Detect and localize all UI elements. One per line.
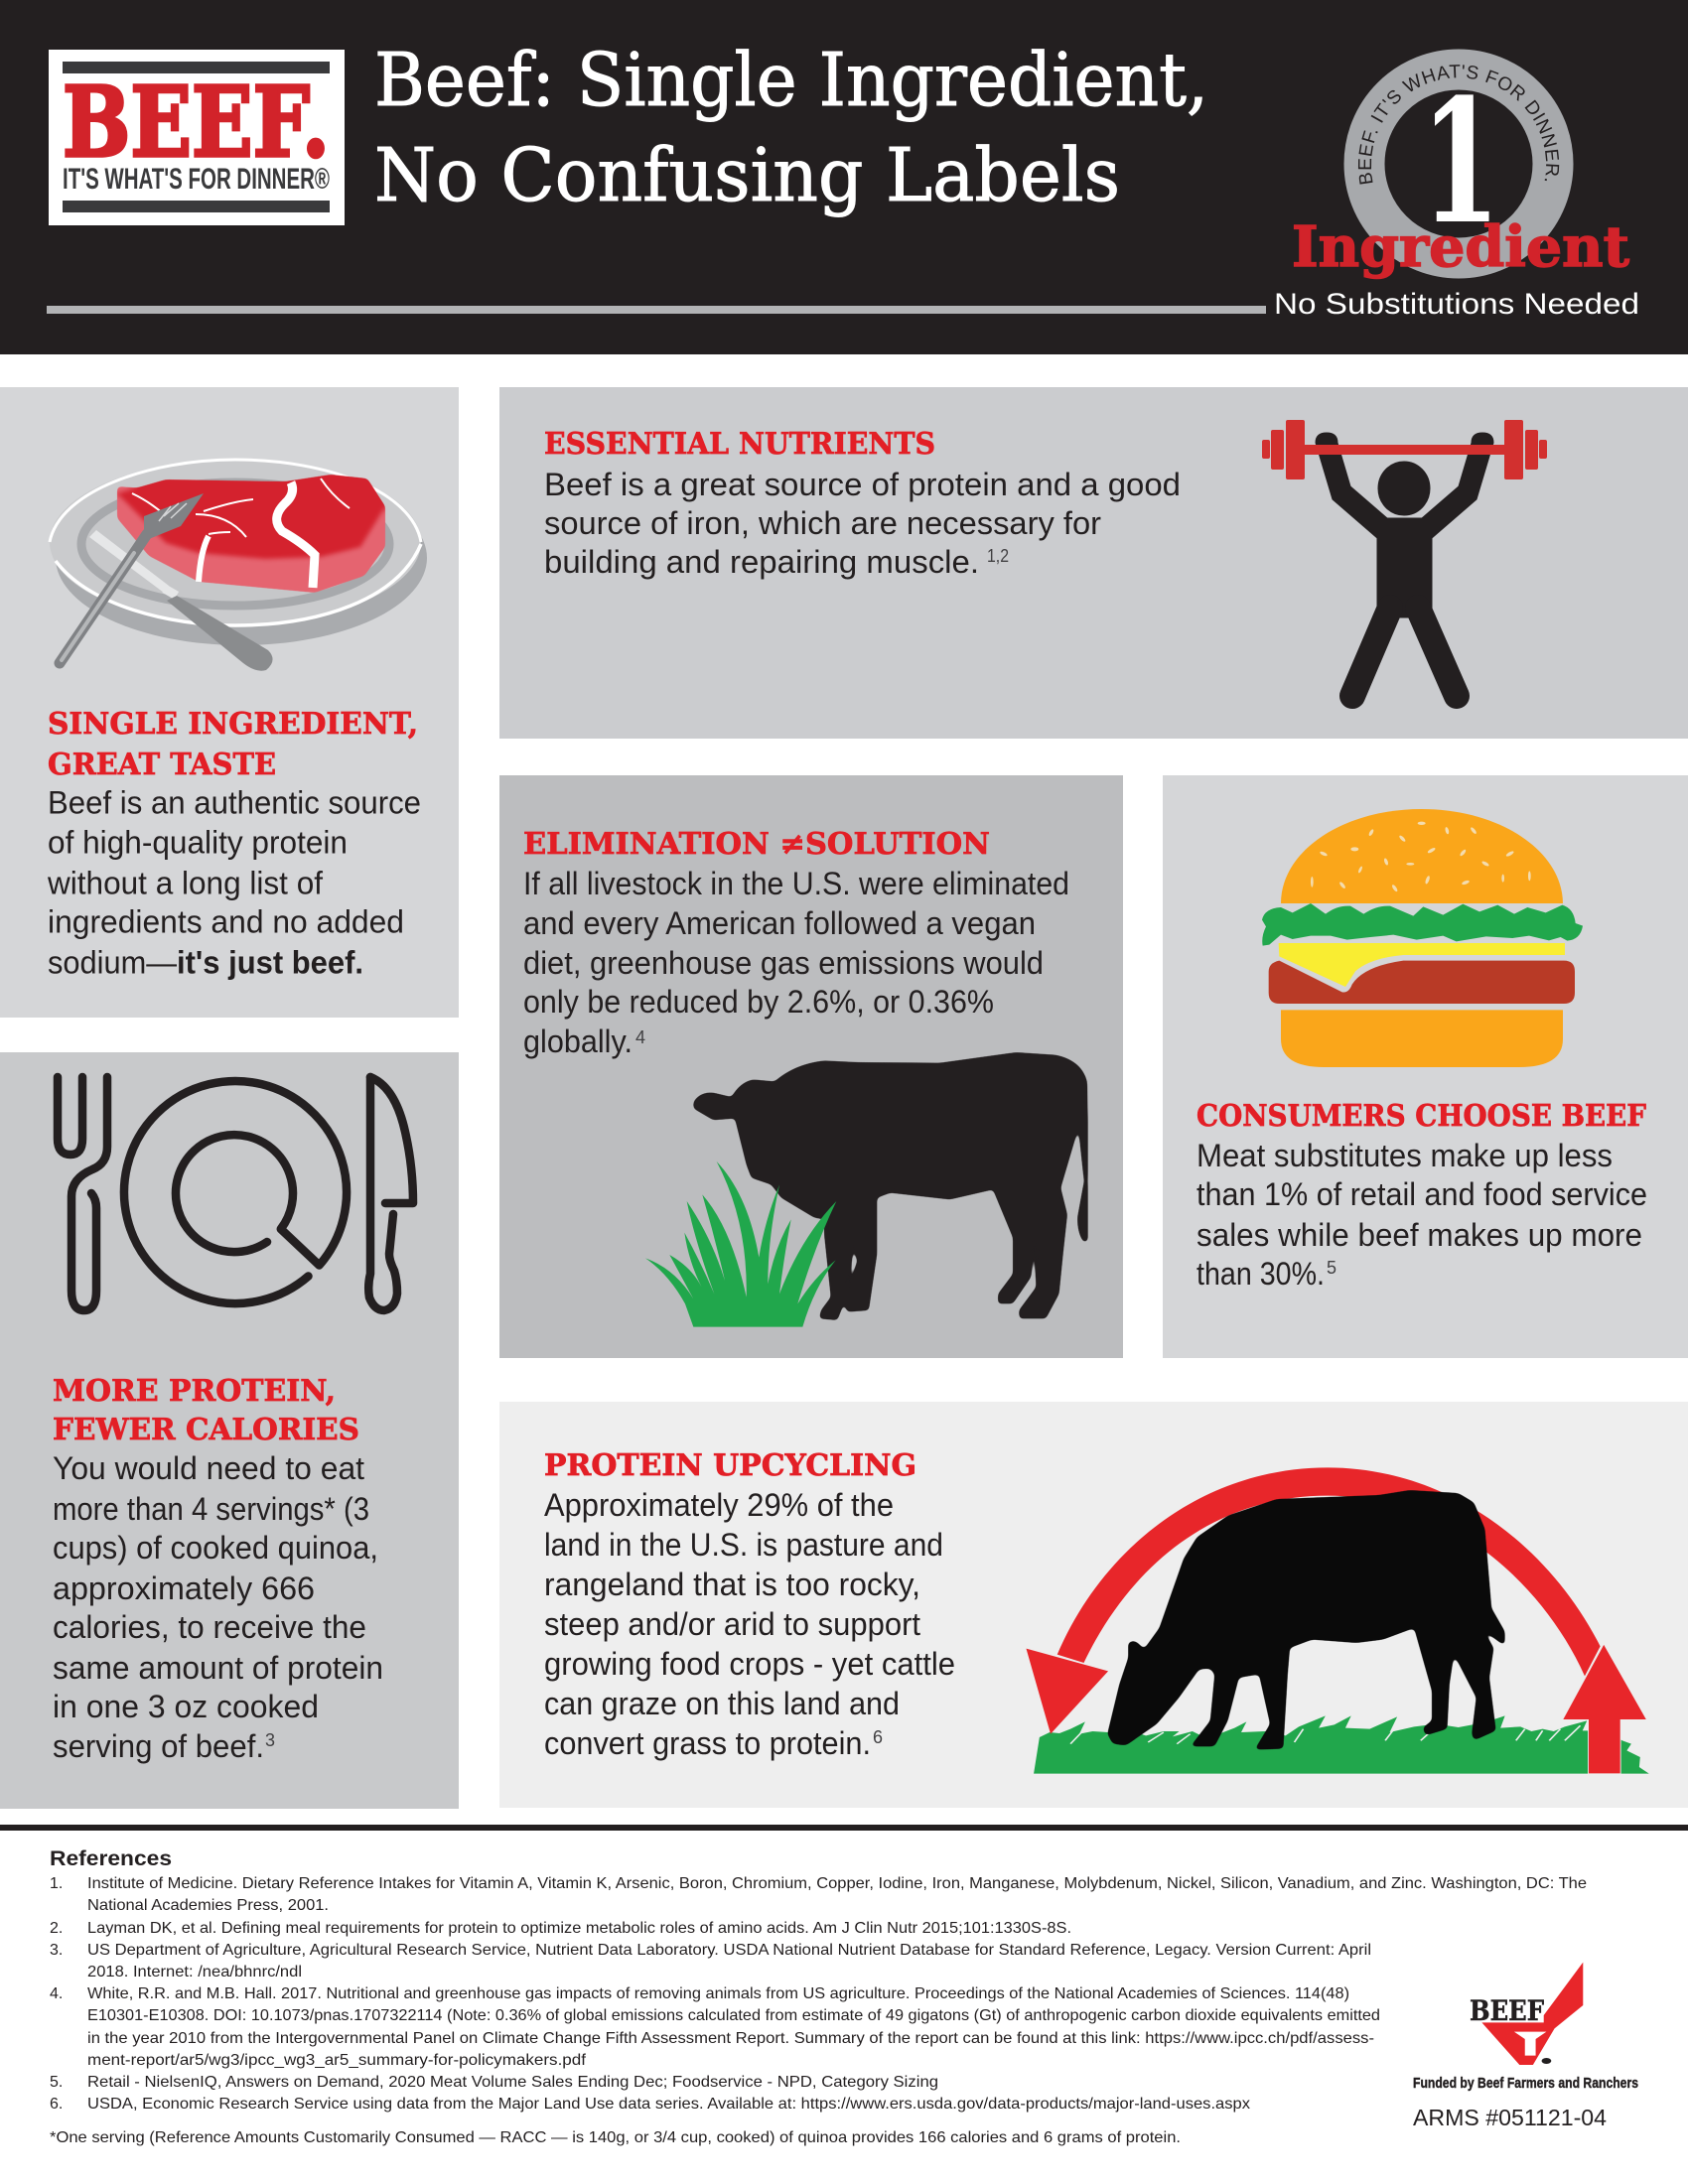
body text: land in the U.S. is pasture and bbox=[544, 1527, 943, 1563]
reference list: 5. bbox=[50, 2074, 63, 2091]
funding logo: ARMS #051121-04 bbox=[1413, 2105, 1607, 2130]
body text: 5 bbox=[1327, 1258, 1336, 1278]
body text: only be reduced by 2.6%, or 0.36% bbox=[523, 984, 994, 1020]
header banner bbox=[0, 0, 1688, 354]
body text: Meat substitutes make up less bbox=[1196, 1138, 1613, 1173]
body text bbox=[1196, 1138, 1647, 1292]
icon: grazing cow with cycle arrows bbox=[1026, 1467, 1649, 1774]
funding logo: BEEF bbox=[1470, 1994, 1544, 2027]
body text: Beef is an authentic source bbox=[48, 784, 421, 820]
funding logo bbox=[1413, 1963, 1638, 2130]
icon: cheeseburger bbox=[1262, 809, 1583, 1067]
reference list: Institute of Medicine. Dietary Reference Intakes for Vitamin A, Vitamin K, Arsenic, Boron, Chromium, Copper, Iodine, Iron, Manganese, Molybdenum, Nickel, Silicon, Vanadium, and Zinc. Washington, DC: The bbox=[87, 1875, 1587, 1892]
reference list: USDA, Economic Research Service using data from the Major Land Use data series. Available at: https://www.ers.usda.gov/data-products/major-land-uses.aspx bbox=[87, 2096, 1250, 2113]
panel: consumers choose beef bbox=[1163, 775, 1688, 1358]
body text: than 1% of retail and food service bbox=[1196, 1176, 1647, 1212]
title: No Confusing Labels bbox=[374, 133, 1120, 218]
reference list: 4. bbox=[50, 1985, 63, 2002]
icon: cow and grass bbox=[645, 1052, 1088, 1327]
body text: more than 4 servings* (3 bbox=[53, 1491, 369, 1527]
body text: in one 3 oz cooked bbox=[53, 1689, 319, 1724]
title: Beef: Single Ingredient, bbox=[374, 38, 1208, 123]
body text: 6 bbox=[873, 1727, 883, 1747]
reference list: White, R.R. and M.B. Hall. 2017. Nutritional and greenhouse gas impacts of removing animals from US agriculture. Proceedings of the National Academies of Sciences. 114(48) bbox=[87, 1985, 1349, 2002]
heading: PROTEIN UPCYCLING bbox=[544, 1448, 916, 1483]
body text bbox=[544, 1487, 955, 1761]
heading: GREAT TASTE bbox=[48, 748, 276, 782]
reference list: 1. bbox=[50, 1875, 63, 1892]
body text: of high-quality protein bbox=[48, 824, 348, 860]
body text: You would need to eat bbox=[53, 1450, 364, 1486]
reference list: 2. bbox=[50, 1920, 63, 1937]
heading: ELIMINATION ≠SOLUTION bbox=[523, 827, 990, 862]
body text: 1,2 bbox=[987, 546, 1009, 566]
body text: and every American followed a vegan bbox=[523, 905, 1036, 941]
badge: 1 ingredient: No Substitutions Needed bbox=[1274, 288, 1639, 321]
body text: ingredients and no added bbox=[48, 903, 404, 939]
body text: Approximately 29% of the bbox=[544, 1487, 894, 1523]
reference list: 6. bbox=[50, 2096, 63, 2113]
body text bbox=[544, 467, 1181, 580]
reference list: E10301-E10308. DOI: 10.1073/pnas.1707322114 (Note: 0.36% of global emissions calculated from estimate of 49 gigatons (Gt) of anthropogenic carbon dioxide equivalents emitted bbox=[87, 2007, 1380, 2024]
heading bbox=[48, 707, 418, 782]
reference list: 3. bbox=[50, 1942, 63, 1959]
body text: rangeland that is too rocky, bbox=[544, 1567, 920, 1602]
body text: source of iron, which are necessary for bbox=[544, 505, 1101, 541]
body text: without a long list of bbox=[47, 866, 323, 901]
body text: building and repairing muscle. bbox=[544, 544, 979, 580]
icon: weightlifter bbox=[1262, 420, 1547, 696]
panel: single ingredient, great taste bbox=[0, 387, 459, 1018]
body text: convert grass to protein. bbox=[544, 1725, 871, 1761]
reference list: Layman DK, et al. Defining meal requirements for protein to optimize metabolic roles of amino acids. Am J Clin Nutr 2015;101:1330S-8S. bbox=[87, 1920, 1071, 1937]
heading: SINGLE INGREDIENT, bbox=[48, 707, 418, 742]
panel: protein upcycling bbox=[499, 1402, 1688, 1808]
badge: 1 ingredient: Ingredient bbox=[1292, 214, 1629, 280]
panel: more protein, fewer calories bbox=[0, 1052, 459, 1809]
references heading: References bbox=[50, 1847, 172, 1870]
reference list: US Department of Agriculture, Agricultural Research Service, Nutrient Data Laboratory. USDA National Nutrient Database for Standard Reference, Legacy. Version Current: April bbox=[87, 1942, 1371, 1959]
logo: Beef It's What's For Dinner: IT'S WHAT'S FOR DINNER® bbox=[63, 163, 330, 196]
reference list bbox=[50, 1875, 1587, 2113]
reference list: ment-report/ar5/wg3/ipcc_wg3_ar5_summary-for-policymakers.pdf bbox=[87, 2052, 587, 2069]
heading bbox=[53, 1374, 359, 1447]
body text: sales while beef makes up more bbox=[1196, 1217, 1642, 1253]
badge: 1 ingredient bbox=[1274, 50, 1639, 321]
body text: globally. bbox=[523, 1024, 633, 1059]
body text: same amount of protein bbox=[53, 1650, 383, 1686]
body text bbox=[53, 1450, 383, 1764]
footnote: *One serving (Reference Amounts Customarily Consumed — RACC — is 140g, or 3/4 cup, cooked) of quinoa provides 166 calories and 6 grams of protein. bbox=[50, 2129, 1181, 2146]
body text: calories, to receive the bbox=[53, 1609, 366, 1645]
logo: Beef It's What's For Dinner bbox=[49, 50, 345, 225]
badge: 1 ingredient: BEEF. IT'S WHAT'S FOR DINNER. bbox=[1358, 65, 1559, 185]
panel: essential nutrients bbox=[499, 387, 1688, 739]
body text: cups) of cooked quinoa, bbox=[53, 1530, 378, 1566]
reference list: 2018. Internet: /nea/bhnrc/ndl bbox=[87, 1964, 302, 1980]
body text: 4 bbox=[635, 1027, 645, 1047]
heading: ESSENTIAL NUTRIENTS bbox=[544, 427, 935, 462]
body text: it's just beef. bbox=[177, 945, 363, 981]
heading: CONSUMERS CHOOSE BEEF bbox=[1196, 1099, 1646, 1134]
references bbox=[50, 1847, 1587, 2146]
body text bbox=[523, 866, 1069, 1059]
icon: steak on a plate with fork and knife bbox=[50, 460, 427, 671]
icon: beef checkmark bbox=[1481, 1963, 1583, 2065]
body text: sodium— bbox=[48, 945, 177, 981]
title bbox=[374, 38, 1208, 218]
badge: 1 ingredient: 1 bbox=[1421, 61, 1500, 262]
reference list: National Academies Press, 2001. bbox=[87, 1897, 329, 1914]
reference list: Retail - NielsenIQ, Answers on Demand, 2020 Meat Volume Sales Ending Dec; Foodservice - NPD, Category Sizing bbox=[87, 2074, 938, 2091]
body text: approximately 666 bbox=[53, 1570, 315, 1606]
heading: FEWER CALORIES bbox=[53, 1413, 359, 1447]
body text: Beef is a great source of protein and a good bbox=[544, 467, 1181, 502]
body text: serving of beef. bbox=[53, 1728, 264, 1764]
heading: MORE PROTEIN, bbox=[53, 1374, 336, 1409]
funding logo: Funded by Beef Farmers and Ranchers bbox=[1413, 2075, 1638, 2092]
body text bbox=[47, 784, 421, 981]
body text: If all livestock in the U.S. were eliminated bbox=[523, 866, 1069, 901]
body text: growing food crops - yet cattle bbox=[544, 1646, 955, 1682]
body text: steep and/or arid to support bbox=[544, 1606, 920, 1642]
body text: than 30%. bbox=[1196, 1256, 1325, 1292]
panel: elimination does not equal solution bbox=[499, 775, 1123, 1358]
body text: can graze on this land and bbox=[544, 1686, 900, 1721]
reference list: in the year 2010 from the Intergovernmental Panel on Climate Change Fifth Assessment Report. Summary of the report can be found at this link: https://www.ipcc.ch/pdf/assess- bbox=[87, 2030, 1374, 2047]
body text: 3 bbox=[265, 1730, 275, 1750]
icon: fork, plate and knife bbox=[58, 1077, 413, 1310]
logo: Beef It's What's For Dinner: BEEF. bbox=[63, 66, 330, 179]
body text: diet, greenhouse gas emissions would bbox=[523, 945, 1044, 981]
